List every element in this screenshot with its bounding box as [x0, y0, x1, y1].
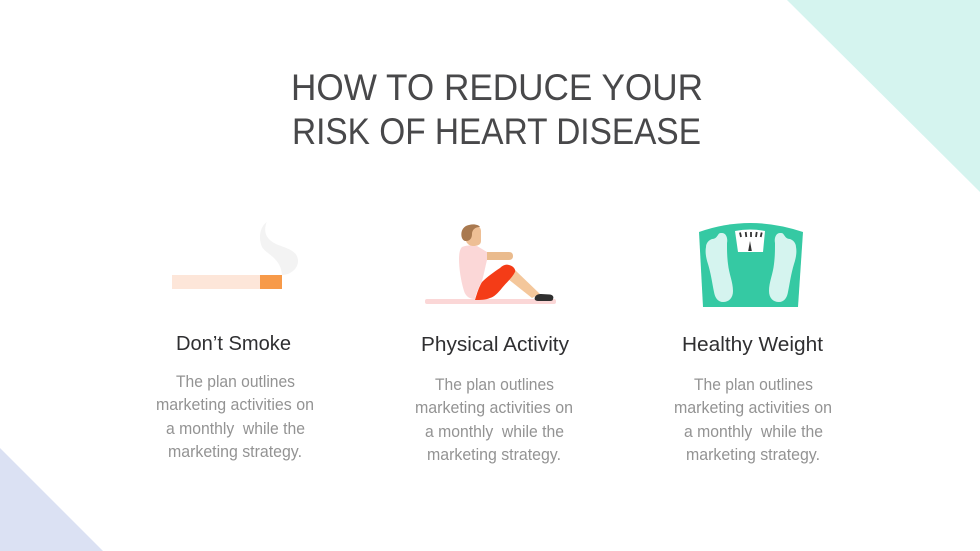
heading: don't smoke: Don’t Smoke	[176, 332, 291, 355]
text block: physical activity	[415, 376, 573, 464]
icon: right footprint	[769, 233, 796, 302]
text block: physical activity: marketing strategy.	[427, 446, 561, 464]
decorative corner: top right mint triangle	[787, 0, 980, 192]
text block: don't smoke: The plan outlines	[176, 373, 295, 391]
icon: bathroom scale	[699, 223, 803, 307]
text block: healthy weight	[674, 376, 832, 464]
text block: healthy weight: a monthly while the	[684, 423, 823, 441]
heading: healthy weight: Healthy Weight	[682, 333, 823, 356]
title: RISK OF HEART DISEASE	[292, 111, 701, 152]
text block: don't smoke	[156, 373, 314, 461]
text block: physical activity: The plan outlines	[435, 376, 554, 394]
icon: person doing sit-ups	[425, 224, 556, 304]
text block: healthy weight: marketing strategy.	[686, 446, 820, 464]
icon: left footprint	[706, 233, 733, 302]
icon: cigarette	[172, 222, 298, 289]
heading: physical activity: Physical Activity	[421, 333, 570, 356]
text block: don't smoke: marketing activities on	[156, 396, 314, 414]
text block: physical activity: marketing activities on	[415, 399, 573, 417]
text block: don't smoke: a monthly while the	[166, 420, 305, 438]
text block: healthy weight: marketing activities on	[674, 399, 832, 417]
decorative corner: bottom left blue triangle	[0, 448, 103, 551]
text block: don't smoke: marketing strategy.	[168, 443, 302, 461]
title: HOW TO REDUCE YOUR	[291, 67, 703, 108]
title	[291, 67, 703, 152]
panel: don't smoke	[156, 222, 314, 461]
panel: healthy weight	[674, 223, 832, 464]
text block: physical activity: a monthly while the	[425, 423, 564, 441]
text block: healthy weight: The plan outlines	[694, 376, 813, 394]
panel: physical activity	[415, 224, 573, 464]
